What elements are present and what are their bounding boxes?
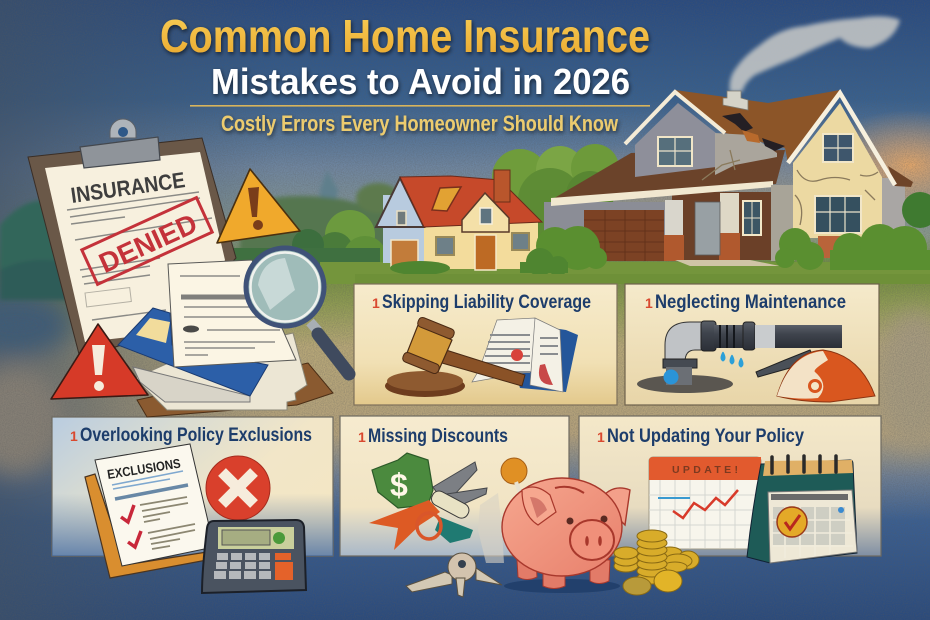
brown clipboard base [137, 363, 333, 417]
roof [400, 176, 542, 227]
title rule [190, 105, 650, 107]
panel: Skipping Liability Coverage [354, 284, 617, 405]
icon: leaking pipe [637, 321, 842, 393]
paper [45, 152, 225, 342]
icon: update calendar: UPDATE! [672, 464, 738, 476]
icon: yellow warning triangle [217, 169, 300, 243]
heading: 1 [597, 429, 605, 445]
ground floor wall [544, 202, 792, 260]
skylight [432, 187, 461, 211]
icon: orange hard hat [777, 350, 875, 402]
clipboard board [28, 138, 236, 358]
main roof [675, 90, 840, 163]
icon: wrench tool [756, 350, 812, 377]
icon: folder [85, 474, 207, 578]
upper window [657, 136, 693, 167]
icon: piggy bank [502, 478, 630, 593]
front paper [168, 260, 296, 367]
paper stack [135, 333, 307, 410]
chimney [723, 91, 748, 110]
brick base [818, 236, 852, 258]
broken shingles [742, 130, 760, 143]
icon: teal bill [435, 517, 473, 543]
icon: exclusions document [95, 444, 214, 566]
panel: Neglecting Maintenance [625, 284, 879, 405]
INSURANCE heading: INSURANCE [69, 167, 187, 208]
lawn foreground [355, 274, 930, 284]
heading: 1 [358, 429, 366, 445]
smoke [730, 16, 900, 92]
magnifying glass [246, 248, 349, 374]
right gable wall [793, 103, 882, 238]
right gable trim [788, 93, 895, 185]
garage door [584, 210, 664, 261]
illustration: damaged house [544, 16, 913, 266]
icon: update calendar [649, 457, 761, 549]
icon: red warning triangle [51, 324, 148, 399]
porch steps [675, 260, 780, 266]
icon: orange coin [501, 458, 527, 495]
blue folder [118, 308, 268, 402]
shrubs [390, 192, 930, 276]
heading: Missing Discounts [368, 426, 508, 447]
title [160, 10, 650, 102]
body walls [383, 195, 427, 263]
left gable trim [625, 92, 725, 144]
icon: torn paper [478, 493, 504, 563]
heading: Not Updating Your Policy [607, 426, 804, 447]
icon: red X circle [206, 456, 270, 520]
roof hole [722, 113, 785, 151]
title: Common Home Insurance [160, 10, 650, 62]
icon: house keys [406, 553, 502, 597]
heading: Neglecting Maintenance [655, 292, 846, 313]
wall cracks [702, 150, 878, 225]
distant trees and tower [0, 144, 930, 300]
left gable wall [635, 103, 716, 177]
porch window [742, 200, 762, 236]
illustration: denied claim stack [28, 119, 349, 417]
heading: 1 [70, 428, 78, 444]
icon: calculator [202, 520, 306, 593]
icon: spiral desk calendar [747, 456, 857, 563]
side window [397, 211, 406, 225]
clipboard clip [80, 119, 160, 168]
heading: Overlooking Policy Exclusions [80, 425, 312, 446]
panel: Overlooking Policy Exclusions [52, 417, 333, 593]
DENIED stamp [82, 198, 212, 284]
DENIED stamp: DENIED [94, 208, 202, 279]
title: Mistakes to Avoid in 2026 [211, 61, 630, 102]
icon: gold coins [614, 530, 699, 595]
right window [512, 233, 529, 250]
heading: 1 [372, 295, 380, 311]
illustration: small house [376, 170, 542, 270]
front gable [462, 193, 509, 232]
garage [391, 240, 418, 268]
front door [475, 235, 496, 270]
icon: dollar tag [372, 453, 433, 508]
eave [551, 181, 773, 206]
right eave roof [888, 166, 913, 187]
left window [436, 237, 454, 255]
right upper window [822, 133, 854, 163]
lower roof [551, 150, 785, 200]
gable window [480, 208, 492, 224]
heading: Skipping Liability Coverage [382, 292, 591, 313]
heading: 1 [645, 295, 653, 311]
subtitle: Costly Errors Every Homeowner Should Know [221, 111, 619, 136]
icon: policy booklet [472, 318, 578, 392]
icon: scissors [369, 462, 487, 550]
panel: Missing Discounts [340, 416, 569, 563]
right side wall [880, 178, 905, 236]
icon: exclusions document: EXCLUSIONS [106, 456, 182, 482]
side siding [771, 185, 795, 261]
right lower window [814, 195, 862, 234]
chimney [494, 170, 510, 202]
damaged wall patch [715, 133, 777, 175]
front door [695, 202, 720, 255]
icon: gavel [385, 316, 525, 397]
panel: Not Updating Your Policy [579, 416, 881, 563]
pillars [664, 193, 740, 261]
icon: dollar tag: $ [390, 467, 408, 503]
